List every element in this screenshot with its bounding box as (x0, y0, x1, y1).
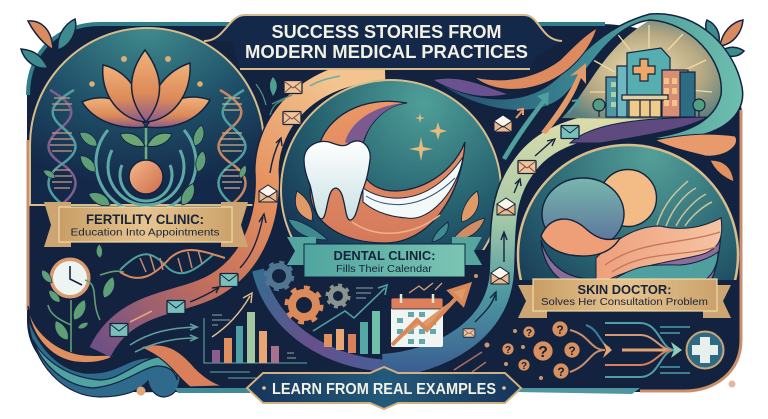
icon: left DNA helix (48, 90, 76, 204)
icon: light rays (590, 25, 712, 92)
icon: stem and seedling (120, 125, 172, 160)
icon: sparkle stars (409, 113, 447, 161)
plate (59, 207, 232, 242)
title plaque (204, 15, 562, 69)
header (391, 298, 443, 309)
ribbon tails (287, 237, 482, 265)
right frame line (640, 110, 741, 391)
bottom left wave (28, 306, 224, 397)
icon: lotus flower (82, 50, 210, 128)
panel: fertility clinic (30, 28, 264, 212)
subheading: Solves Her Consultation Problem (541, 297, 708, 308)
envelopes along the paths (110, 80, 579, 337)
teal frame top right (535, 22, 605, 26)
question marks: ? (505, 345, 511, 356)
arrowhead (603, 342, 612, 358)
question marks: ? (538, 344, 548, 361)
teal frame top left (28, 24, 240, 95)
teal wave (33, 340, 177, 388)
path band: orange to purple (100, 70, 385, 352)
bar chart: left (204, 293, 307, 378)
icon: hospital (593, 48, 705, 117)
heading: DENTAL CLINIC: (334, 248, 436, 263)
bars (212, 312, 279, 363)
stray dot right (728, 380, 736, 388)
ribbon tails (44, 202, 248, 247)
bottom banner (247, 367, 521, 409)
label: LEARN FROM REAL EXAMPLES (272, 381, 496, 398)
peach drop (710, 160, 734, 182)
rings (401, 294, 433, 303)
icon: orb (129, 160, 163, 194)
banner: dental clinic (287, 237, 482, 277)
icon: gray gear (327, 285, 349, 307)
mini trend (409, 283, 442, 293)
top accents near title (256, 76, 340, 115)
plate trim (204, 15, 562, 69)
circle (280, 79, 502, 250)
icon: blue gear (266, 262, 292, 290)
teal arrow (502, 92, 549, 160)
banner: skin doctor (518, 279, 731, 318)
stray dot left (136, 386, 146, 396)
icon: medical plus (686, 332, 724, 368)
lower blue arc (258, 270, 390, 366)
motion arrows (130, 324, 197, 352)
blue sphere (542, 178, 624, 250)
icon: clock (49, 257, 91, 299)
plate (533, 279, 717, 311)
leaf accents (43, 124, 250, 211)
corner leaves right (706, 20, 744, 56)
trend line (313, 285, 387, 331)
banner: fertility clinic (44, 202, 248, 247)
teal swoosh (434, 14, 743, 139)
corner leaves left (21, 19, 76, 68)
heading: SKIN DOCTOR: (578, 282, 672, 297)
question marks (505, 323, 576, 379)
teal arrowhead (671, 342, 682, 358)
path band fill (383, 122, 650, 366)
flow diagram: questions to solution (454, 274, 724, 380)
small teal arrow (568, 100, 579, 113)
scattered dots (474, 274, 543, 380)
purple ground ribbon (570, 117, 707, 143)
icon: vines (40, 244, 124, 352)
subheading: Fills Their Calendar (336, 264, 433, 275)
teal bottom strip (175, 388, 250, 393)
orange wave (28, 306, 116, 363)
orange ribbon (140, 345, 224, 387)
panel: dental clinic (280, 79, 502, 250)
circle (516, 144, 740, 280)
panel: skin doctor (516, 144, 740, 280)
teal bottom strip right (515, 388, 640, 394)
outer blue wave (28, 318, 180, 397)
legend marks (356, 288, 373, 298)
icon: horizontal DNA (120, 250, 225, 278)
left frame line (26, 140, 30, 310)
purple wave (434, 79, 507, 96)
trend arrow (212, 293, 252, 337)
question marks: ? (556, 323, 564, 337)
ribbon tails (518, 285, 731, 318)
dome (30, 28, 264, 205)
orange arrow (541, 63, 586, 134)
legend marks (212, 315, 296, 358)
title: SUCCESS STORIES FROM (272, 22, 502, 42)
path band fill (100, 70, 385, 352)
growth arrow (392, 285, 469, 345)
plaque dots (262, 386, 506, 390)
teal layer (615, 252, 718, 279)
bar chart: center (324, 311, 380, 354)
laurel leaves (288, 191, 485, 242)
question marks: ? (526, 328, 532, 339)
crescent (310, 101, 465, 243)
page (391, 298, 443, 347)
peach sphere (600, 170, 656, 226)
growth arrows (502, 63, 586, 160)
orange wave (474, 28, 597, 89)
lower left illustration (40, 244, 225, 352)
plaque (247, 367, 521, 409)
path band: green to teal (383, 122, 650, 366)
small arrows on the paths (130, 138, 555, 322)
icon: orange gear (286, 288, 322, 322)
plate (304, 244, 465, 277)
subheading: Education Into Appointments (70, 228, 220, 238)
icon: tooth (304, 141, 370, 220)
question marks: ? (521, 361, 527, 372)
axes (204, 318, 307, 378)
small orange arrow (516, 109, 523, 118)
heading: FERTILITY CLINIC: (86, 211, 204, 227)
icon: concentric rings (96, 130, 196, 212)
peach flourish (655, 134, 737, 156)
plate (204, 15, 562, 69)
center gears and charts (266, 262, 387, 354)
converging lines (570, 323, 690, 377)
question marks: ? (568, 344, 576, 358)
question bubbles (502, 321, 580, 379)
cells (397, 312, 436, 344)
swoosh glow behind hospital (562, 20, 726, 120)
skin wave (541, 218, 721, 279)
icon: right DNA helix (218, 90, 246, 204)
motion lines (657, 181, 712, 226)
peach blob (541, 219, 620, 256)
question marks: ? (557, 365, 565, 379)
dots (89, 56, 203, 87)
dashes (454, 352, 486, 372)
icon: calendar (391, 283, 469, 347)
skin wave layer (596, 218, 722, 279)
skin stripes (605, 232, 720, 272)
title second line: MODERN MEDICAL PRACTICES (245, 42, 528, 62)
